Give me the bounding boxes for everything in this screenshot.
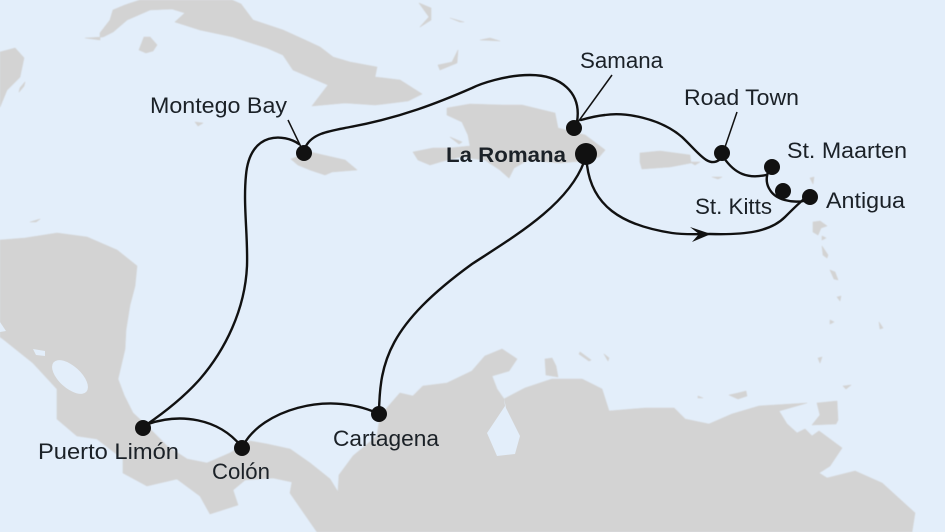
land: Jamaica bbox=[291, 152, 357, 175]
land: small Caribbean islands bbox=[19, 3, 722, 222]
label: Colon: Colón bbox=[212, 459, 270, 484]
cruise route bbox=[146, 75, 804, 446]
route: Road Town to Samana bbox=[581, 114, 719, 162]
route: Cartagena to La Romana bbox=[379, 162, 584, 412]
marker: Samana bbox=[566, 120, 582, 136]
marker: Colon bbox=[234, 440, 250, 456]
route: Montego Bay to Puerto Limon bbox=[146, 138, 299, 425]
arrowhead bbox=[690, 227, 711, 242]
marker: Antigua bbox=[802, 189, 818, 205]
leader: Samana bbox=[578, 75, 612, 122]
route: St. Maarten to Road Town bbox=[724, 158, 766, 176]
marker: Montego Bay bbox=[296, 145, 312, 161]
route: Antigua to St. Maarten bbox=[767, 172, 804, 202]
route: Samana to Montego Bay bbox=[306, 75, 578, 146]
route: Colon to Cartagena bbox=[244, 403, 377, 444]
lake Maracaibo bbox=[487, 398, 520, 456]
label: Samana: Samana bbox=[580, 48, 664, 73]
land: Cuba bbox=[85, 0, 422, 106]
land: Central and South America bbox=[0, 233, 915, 532]
leader lines bbox=[288, 75, 737, 150]
lake Nicaragua bbox=[46, 354, 94, 400]
leader: Montego Bay bbox=[288, 120, 301, 147]
label: Antigua: Antigua bbox=[826, 188, 906, 213]
land: Trinidad bbox=[812, 401, 838, 425]
port labels bbox=[38, 48, 907, 484]
marker: La Romana bbox=[575, 143, 597, 165]
label: Road Town: Road Town bbox=[684, 85, 799, 110]
leader: Road Town bbox=[724, 112, 737, 150]
marker: St. Kitts bbox=[775, 183, 791, 199]
label: St. Maarten: St. Maarten bbox=[787, 138, 907, 163]
label: St. Kitts: St. Kitts bbox=[695, 194, 772, 219]
land: Isle of Youth bbox=[139, 37, 157, 53]
land: Aruba Curacao and Margarita bbox=[545, 352, 747, 399]
label: Puerto Limon: Puerto Limón bbox=[38, 439, 179, 464]
label: La Romana: La Romana bbox=[446, 144, 566, 167]
route: Puerto Limon to Colon bbox=[148, 419, 241, 446]
marker: Road Town bbox=[714, 145, 730, 161]
land: Yucatan bbox=[0, 48, 24, 107]
route: La Romana to Antigua bbox=[587, 165, 804, 234]
label: Cartagena: Cartagena bbox=[333, 426, 440, 451]
label: Montego Bay: Montego Bay bbox=[150, 93, 287, 118]
marker: Puerto Limon bbox=[135, 420, 151, 436]
marker: Cartagena bbox=[371, 406, 387, 422]
sea inlets bbox=[0, 322, 45, 356]
land: Hispaniola bbox=[413, 104, 605, 178]
marker: St. Maarten bbox=[764, 159, 780, 175]
port markers bbox=[135, 120, 818, 456]
land: Puerto Rico bbox=[640, 151, 691, 169]
land: Lesser Antilles bbox=[810, 177, 883, 389]
